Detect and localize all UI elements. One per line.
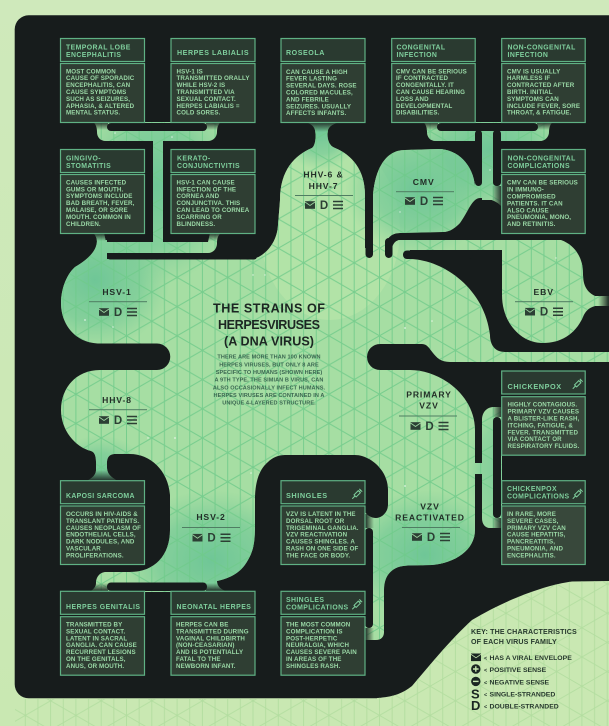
panel: chickenpox: ITCHING, FATIGUE, &	[508, 422, 573, 429]
panel: roseola: COLORED MACULES,	[286, 90, 353, 96]
panel: herpes labialis: SEXUAL CONTACT.	[176, 96, 236, 103]
panel: chickenpox complications: SEVERE CASES,	[507, 518, 559, 525]
panel: shingles: RASH ON ONE SIDE OF	[286, 546, 359, 552]
panel: shingles complications: COMPLICATIONS	[286, 604, 348, 612]
panel: roseola: AFFECTS INFANTS.	[286, 110, 347, 117]
panel: chickenpox: PRIMARY VZV CAUSES	[508, 409, 579, 416]
lobe label: primary VZV: PRIMARY	[406, 390, 452, 400]
panel: neonatal herpes: AND IS POTENTIALLY	[176, 649, 244, 656]
panel: congenital infection	[392, 38, 475, 122]
intro paragraph: UNIQUE 4-LAYERED STRUCTURE.	[222, 401, 316, 407]
panel: shingles complications: POST-HERPETIC	[286, 635, 338, 642]
lobe label: HHV-6 and HHV-7: HHV-7	[309, 181, 338, 191]
lobe label: CMV	[396, 177, 454, 208]
panel: temporal lobe encephalitis: TEMPORAL LOBE	[66, 44, 131, 52]
icon: syringe	[351, 489, 362, 500]
panel: herpes genitalis: HERPES GENITALIS	[66, 604, 140, 611]
panel: congenital infection: CAN CAUSE HEARING	[396, 89, 465, 96]
title: THE STRAINS OF	[213, 302, 325, 316]
panel: non-congenital complications: NON-CONGENITAL	[508, 156, 576, 162]
intro paragraph: HERPES VIRUSES ARE CONTAINED IN A	[214, 393, 324, 399]
intro paragraph: ALSO OCCASIONALLY INFECT HUMANS.	[213, 385, 326, 391]
key legend: <	[484, 656, 487, 662]
panel: non-congenital infection: INCLUDE FEVER, SORE	[507, 103, 580, 110]
key legend: NEGATIVE SENSE	[490, 679, 550, 686]
panel: congenital infection: DEVELOPMENTAL	[396, 103, 453, 110]
panel: temporal lobe encephalitis: SUCH AS SEIZURES,	[66, 96, 130, 103]
icon: double-stranded: D	[471, 698, 480, 713]
panel: non-congenital complications	[502, 150, 585, 234]
lobe label: HSV-1	[89, 287, 147, 319]
panel: congenital infection: CONGENITALLY. IT	[396, 82, 454, 89]
lobe label: EBV	[515, 287, 573, 319]
panel: shingles complications: NEURALGIA, WHICH	[286, 642, 350, 649]
panel: roseola: AND FEBRILE	[286, 96, 329, 103]
neck shadows	[86, 122, 609, 640]
lobe label: CMV: CMV	[413, 177, 435, 187]
panel: kaposi sarcoma: VASCULAR	[66, 546, 101, 552]
panel: gingivostomatitis: MALAISE, OR SORE	[66, 207, 128, 214]
intro paragraph	[213, 355, 326, 407]
panel: non-congenital complications: ALSO CAUSE	[507, 207, 549, 214]
panel: non-congenital infection	[502, 38, 585, 122]
panel: non-congenital complications: COMPROMISED	[507, 194, 556, 200]
panel: herpes labialis: TRANSMITTED VIA	[176, 89, 235, 96]
panel: keratoconjunctivitis: KERATO-	[177, 156, 211, 162]
panel: kaposi sarcoma: OCCURS IN HIV-AIDS &	[66, 511, 138, 518]
panel: chickenpox complications: CHICKENPOX	[507, 486, 557, 493]
panel: chickenpox complications	[502, 481, 585, 564]
icon: negative sense	[471, 677, 480, 686]
panel: herpes labialis: HERPES LABIALIS	[177, 49, 249, 57]
panel: chickenpox: A BLISTER-LIKE RASH,	[508, 416, 580, 422]
panel: shingles complications: SHINGLES	[286, 597, 324, 604]
panel: congenital infection: IF CONTRACTED	[396, 75, 448, 82]
lobe label: primary VZV: VZV	[419, 400, 439, 410]
panel: roseola: FEVER LASTING	[286, 76, 337, 83]
panel: neonatal herpes: FATAL TO THE	[176, 656, 221, 663]
key background blob	[377, 581, 609, 726]
panel: keratoconjunctivitis: SCARRING OR	[176, 214, 222, 221]
panel: non-congenital complications: COMPLICATIONS	[508, 163, 570, 170]
panel: neonatal herpes	[171, 591, 255, 675]
dark rails between branches	[107, 123, 538, 628]
panel: temporal lobe encephalitis: ENCEPHALITIS	[66, 52, 121, 59]
panel: shingles: DORSAL ROOT OR	[286, 518, 345, 525]
key legend: DOUBLE-STRANDED	[490, 704, 559, 710]
panel: kaposi sarcoma: ENDOTHELIAL CELLS,	[66, 532, 136, 539]
key legend	[471, 628, 577, 713]
panel: shingles: THE FACE OR BODY.	[286, 552, 350, 559]
panel: roseola	[281, 38, 365, 122]
panel: herpes genitalis	[60, 591, 144, 675]
panel: roseola: CAN CAUSE A HIGH	[286, 69, 348, 76]
icon: envelope	[471, 654, 481, 661]
panel: shingles: TRIGEMINAL GANGLIA.	[286, 525, 359, 532]
panel: keratoconjunctivitis	[171, 150, 255, 234]
lobe label: HHV-6 and HHV-7: HHV-6 &	[303, 170, 344, 180]
panel: chickenpox: RESPIRATORY FLUIDS.	[508, 443, 580, 450]
panel: non-congenital infection: CMV IS USUALLY	[507, 68, 561, 75]
panel: herpes labialis: WHILE HSV-2 IS	[176, 82, 225, 89]
panel: temporal lobe encephalitis: MOST COMMON	[66, 68, 116, 75]
icon: syringe	[571, 379, 583, 390]
panel: kaposi sarcoma: CAUSES NEOPLASM OF	[66, 525, 141, 532]
intro paragraph: A 9TH TYPE, THE SIMIAN B VIRUS, CAN	[215, 378, 323, 384]
lobe label: HSV-2: HSV-2	[196, 512, 226, 522]
icon: single-stranded: S	[471, 686, 480, 702]
panel: gingivostomatitis	[60, 150, 144, 234]
lobe label: VZV reactivated: REACTIVATED	[395, 513, 465, 523]
panel: temporal lobe encephalitis: CAUSE SYMPTOMS	[66, 89, 126, 96]
panel: congenital infection: LOSS AND	[396, 96, 429, 103]
panel: shingles: SHINGLES	[286, 491, 328, 500]
panel: gingivostomatitis: MOUTH. COMMON IN	[66, 214, 131, 221]
panel: gingivostomatitis: BAD BREATH, FEVER,	[66, 200, 135, 207]
icon: syringe	[351, 599, 362, 611]
panel: kaposi sarcoma: TRANSLANT PATIENTS.	[66, 518, 139, 525]
key legend: HAS A VIRAL ENVELOPE	[490, 655, 572, 662]
panel: non-congenital complications: IN IMMUNO-	[507, 187, 544, 194]
panel: shingles: CAUSES SHINGLES. A	[286, 539, 355, 546]
panel: congenital infection: DISABILITIES.	[396, 110, 440, 117]
panel: shingles complications: IN AREAS OF THE	[286, 656, 342, 663]
key legend: <	[484, 704, 487, 710]
panel: roseola: SEIZURES. USUALLY	[286, 103, 352, 110]
intro paragraph: SPECIFIC TO HUMANS (SHOWN HERE)	[216, 370, 322, 376]
panel: chickenpox complications: CAUSE HEPATITIS,	[507, 532, 566, 539]
panel: non-congenital infection: NON-CONGENITAL	[508, 44, 576, 52]
panel: non-congenital infection: THROAT, & FATIGUE.	[507, 110, 572, 117]
icon: syringe	[571, 489, 583, 500]
panel: keratoconjunctivitis: CONJUNCTIVA. THIS	[176, 200, 240, 207]
panel: shingles complications: THE MOST COMMON	[286, 622, 351, 628]
panel: keratoconjunctivitis: CONJUNCTIVITIS	[177, 163, 240, 170]
panel: shingles: VZV IS LATENT IN THE	[286, 511, 356, 518]
panel: gingivostomatitis: CAUSES INFECTED	[66, 179, 127, 186]
panel: congenital infection: CMV CAN BE SERIOUS	[396, 68, 467, 75]
panel: shingles complications	[281, 591, 365, 675]
panel: chickenpox complications: PANCREATITIS,	[507, 539, 555, 546]
panel: chickenpox: VIA CONTACT OR	[508, 436, 562, 443]
panel: temporal lobe encephalitis: MENTAL STATUS.	[66, 110, 120, 117]
panel: chickenpox: HIGHLY CONTAGIOUS.	[508, 402, 577, 409]
panel: neonatal herpes: NEWBORN INFANT.	[176, 663, 236, 670]
panel: shingles complications: SHINGLES RASH.	[286, 663, 340, 670]
lobe label: VZV reactivated: D	[427, 532, 435, 544]
lobe label: HHV-6 and HHV-7	[295, 170, 353, 212]
lobe label: primary VZV: D	[425, 421, 434, 433]
key legend: <	[484, 692, 487, 698]
lobe label: HHV-8	[89, 395, 147, 427]
panel: temporal lobe encephalitis: CAUSE OF SPORADIC	[66, 75, 135, 82]
lobe label: EBV: EBV	[534, 287, 554, 297]
panel: chickenpox complications: PNEUMONIA, AND	[507, 546, 564, 552]
panel: chickenpox complications: IN RARE, MORE	[507, 511, 556, 518]
green virus network shape	[61, 122, 609, 640]
title: HERPESVIRUSES	[218, 318, 320, 332]
panel: keratoconjunctivitis: CORNEA AND	[176, 193, 220, 200]
key legend: POSITIVE SENSE	[490, 667, 547, 674]
bottom pattern band	[15, 699, 609, 726]
panel: herpes genitalis: ON THE GENITALS,	[66, 656, 126, 663]
panel: keratoconjunctivitis: INFECTION OF THE	[176, 186, 236, 193]
panel: gingivostomatitis: GINGIVO-	[66, 156, 101, 162]
panel: neonatal herpes: HERPES CAN BE	[176, 622, 228, 628]
key legend: KEY: THE CHARACTERISTICS	[471, 628, 577, 636]
panel: non-congenital infection: INFECTION	[508, 52, 548, 59]
lobe label: VZV reactivated: VZV	[420, 501, 440, 511]
panel: kaposi sarcoma	[60, 481, 144, 564]
lobe label: HSV-1: HSV-1	[102, 287, 132, 297]
title: (A DNA VIRUS)	[224, 334, 314, 348]
panel: herpes genitalis: ANUS, OR MOUTH.	[66, 663, 124, 670]
panel: shingles complications: COMPLICATION IS	[286, 628, 343, 635]
panel: gingivostomatitis: SYMPTOMS INCLUDE	[66, 193, 132, 200]
panel: herpes labialis: TRANSMITTED ORALLY	[176, 75, 250, 82]
panel: neonatal herpes: VAGINAL CHILDBIRTH	[176, 635, 245, 642]
icon: positive sense	[471, 664, 480, 674]
panel: herpes labialis: HSV-1 IS	[176, 68, 203, 75]
panel: herpes genitalis: TRANSMITTED BY	[66, 622, 123, 628]
panel: herpes labialis	[171, 38, 255, 122]
panel: shingles	[281, 481, 365, 564]
panel: herpes genitalis: SEXUAL CONTACT.	[66, 628, 125, 635]
lobe label: HSV-2: D	[207, 533, 216, 545]
panel: herpes labialis: HERPES LABIALIS =	[176, 103, 240, 110]
panel: chickenpox complications: PRIMARY VZV CAN	[507, 525, 566, 532]
lobe label: HSV-2	[182, 512, 240, 545]
panel: kaposi sarcoma: DARK NODULES, AND	[66, 539, 135, 546]
key legend: <	[484, 680, 487, 686]
lobe label: EBV: D	[540, 307, 548, 319]
panel: chickenpox complications: COMPLICATIONS	[507, 494, 570, 500]
panel: non-congenital infection: SYMPTOMS CAN	[507, 96, 559, 103]
panel: neonatal herpes: (NON-CEASARIAN)	[176, 642, 235, 649]
panel: chickenpox	[502, 371, 585, 455]
lobe label: VZV reactivated	[395, 501, 465, 544]
lobe label: HHV-6 and HHV-7: D	[320, 200, 328, 212]
panel: congenital infection: CONGENITAL	[396, 44, 446, 52]
panel: herpes genitalis: LATENT IN SACRAL	[66, 635, 127, 642]
panel: roseola: SEVERAL DAYS. ROSE	[286, 83, 357, 90]
panel: shingles: VZV REACTIVATION	[286, 532, 348, 539]
panel: keratoconjunctivitis: HSV-1 CAN CAUSE	[176, 179, 235, 186]
panel: congenital infection: INFECTION	[396, 52, 437, 59]
lobe label: HSV-1: D	[114, 307, 122, 319]
key legend: <	[484, 668, 487, 674]
intro paragraph: HERPES VIRUSES, BUT ONLY 8 ARE	[219, 362, 319, 368]
panel: keratoconjunctivitis: BLINDNESS.	[176, 221, 215, 228]
panel: kaposi sarcoma: KAPOSI SARCOMA	[66, 493, 135, 500]
panel: keratoconjunctivitis: CAN LEAD TO CORNEA	[176, 207, 250, 214]
panel: chickenpox: FEVER. TRANSMITTED	[508, 429, 578, 436]
title	[213, 302, 325, 348]
key legend: OF EACH VIRUS FAMILY	[471, 638, 557, 646]
lobe label: primary VZV	[399, 390, 457, 433]
panel: gingivostomatitis: GUMS OR MOUTH.	[66, 186, 124, 193]
intro paragraph: THERE ARE MORE THAN 100 KNOWN	[217, 355, 321, 361]
panel: herpes genitalis: RECURRENT LESIONS	[66, 649, 136, 656]
panel: non-congenital complications: PATIENTS. IT CAN	[507, 200, 563, 207]
panel: shingles complications: CAUSES SEVERE PAIN	[286, 649, 357, 656]
panel: chickenpox complications: ENCEPHALITIS.	[507, 552, 556, 559]
lobe label: HHV-8: D	[114, 415, 122, 427]
panel: neonatal herpes: TRANSMITTED DURING	[176, 628, 249, 635]
key legend: SINGLE-STRANDED	[490, 692, 555, 698]
panel: herpes labialis: COLD SORES.	[176, 110, 221, 117]
panel: non-congenital infection: CONTRACTED AFTER	[507, 82, 575, 89]
lobe label: CMV: D	[420, 196, 428, 208]
panel: non-congenital complications: AND RETINITIS.	[507, 221, 556, 228]
panel: kaposi sarcoma: PROLIFERATIONS.	[66, 552, 124, 559]
panel: temporal lobe encephalitis	[60, 38, 144, 122]
panel: non-congenital infection: BIRTH. INITIAL	[507, 89, 553, 96]
panel: neonatal herpes: NEONATAL HERPES	[176, 604, 251, 611]
panel: non-congenital complications: CMV CAN BE SERIOUS	[507, 180, 578, 187]
panel: non-congenital complications: PNEUMONIA, MONO,	[507, 214, 571, 221]
panel: temporal lobe encephalitis: ENCEPHALITIS, CAN	[66, 82, 131, 89]
panel: gingivostomatitis: CHILDREN.	[66, 221, 101, 228]
panel: herpes genitalis: GANGLIA. CAN CAUSE	[66, 642, 137, 649]
panel: gingivostomatitis: STOMATITIS	[66, 163, 111, 170]
panel: chickenpox: CHICKENPOX	[508, 382, 562, 391]
panel: non-congenital infection: HARMLESS IF	[507, 75, 550, 82]
panel: roseola: ROSEOLA	[286, 49, 325, 57]
lobe label: HHV-8: HHV-8	[102, 395, 132, 405]
panel: temporal lobe encephalitis: APHASIA, & ALTERED	[66, 103, 135, 110]
